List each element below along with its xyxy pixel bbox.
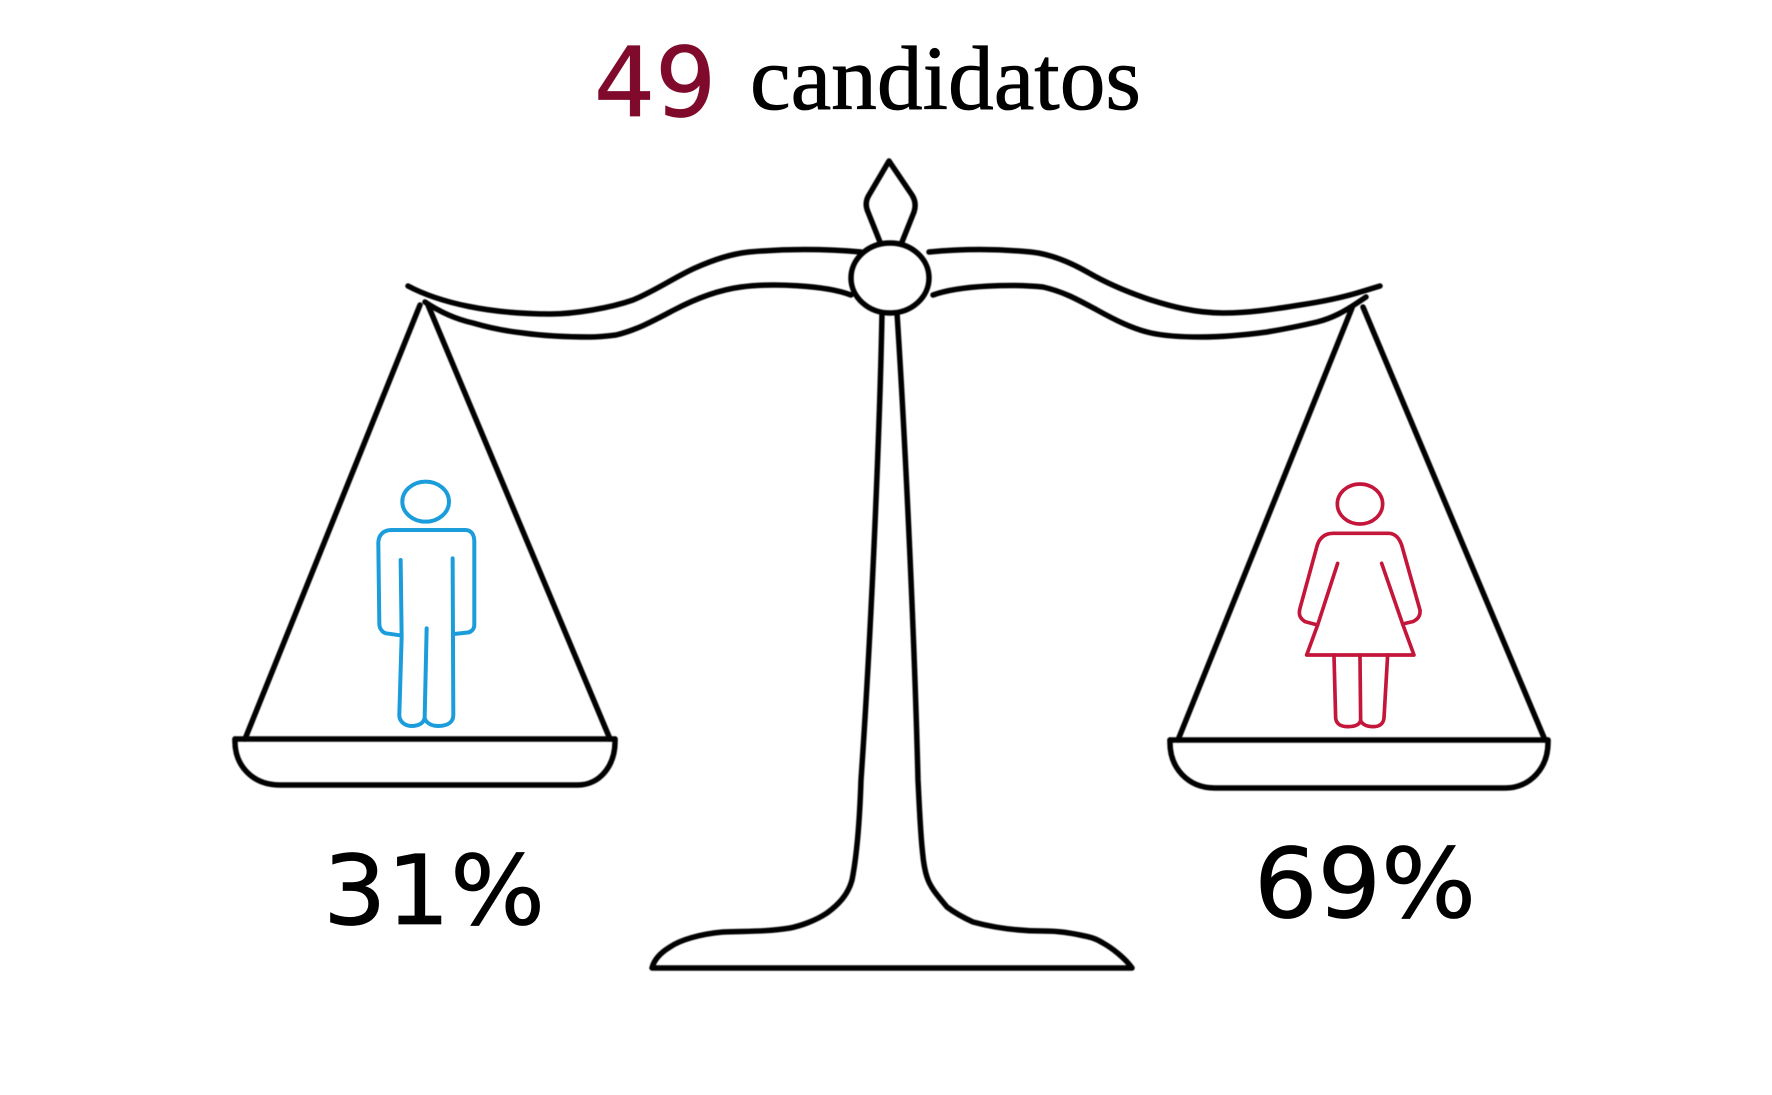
- balance scale: [235, 161, 1548, 968]
- title word: candidatos: [750, 28, 1141, 129]
- title: [594, 27, 1141, 139]
- stand: [652, 313, 1132, 968]
- right pan: [1170, 307, 1548, 788]
- icon: woman: [1299, 484, 1420, 727]
- hub: [851, 243, 929, 313]
- left pan: [235, 305, 615, 785]
- finial: [866, 161, 915, 242]
- men percentage: 31%: [323, 835, 545, 947]
- icon: man: [378, 482, 474, 726]
- beam: [408, 250, 1380, 337]
- title number: 49: [594, 27, 716, 139]
- women percentage: 69%: [1254, 828, 1476, 940]
